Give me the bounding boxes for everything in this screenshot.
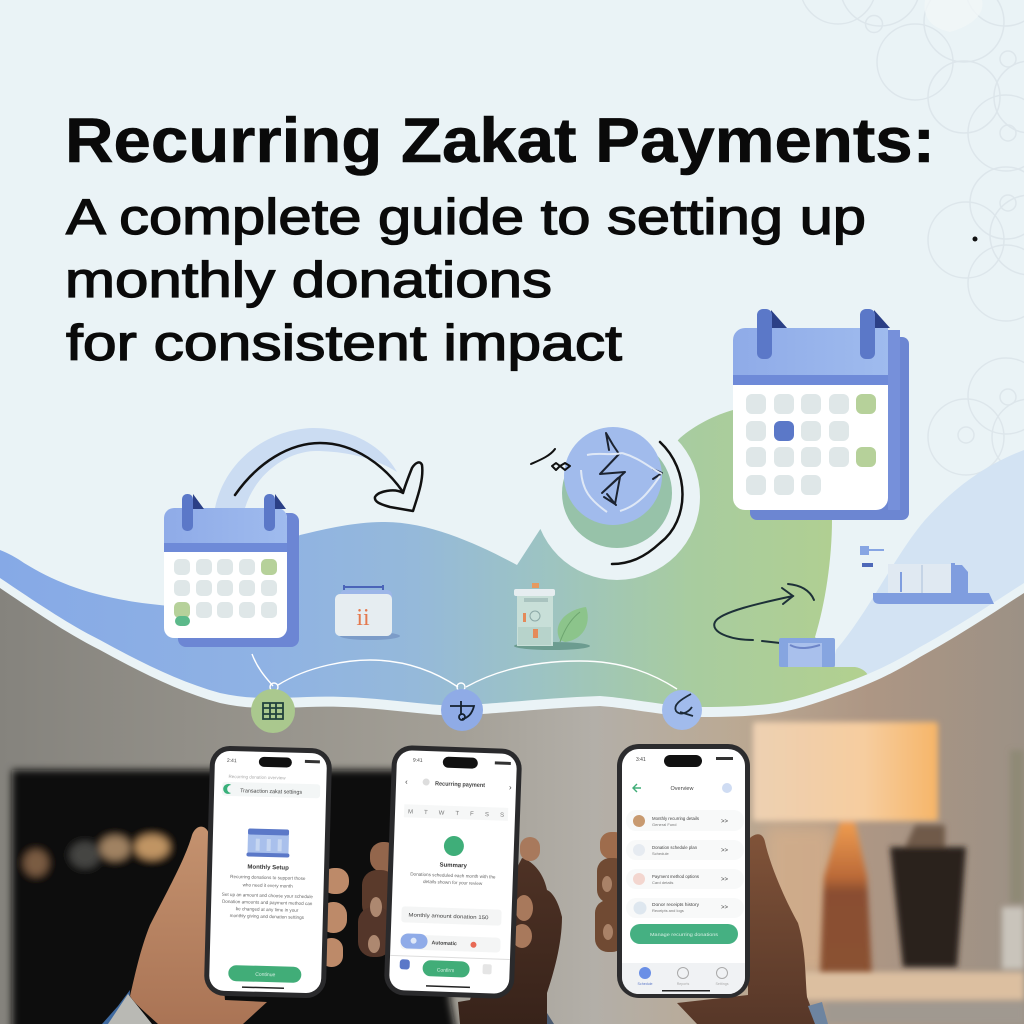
phone 2 copy: Summary bbox=[439, 863, 468, 870]
phone 2 copy: details shown for your review bbox=[423, 879, 483, 886]
subtitle: for consistent impact bbox=[66, 315, 622, 371]
phone 2 bbox=[384, 745, 522, 999]
white cut-out circle around centre badge bbox=[534, 414, 700, 580]
subtitle: monthly donations bbox=[65, 252, 552, 308]
phone 2 toggle row: Automatic bbox=[431, 940, 457, 947]
phone 2 header bbox=[405, 777, 512, 792]
phone 3 tab bar: Reports bbox=[677, 982, 689, 986]
phone 3 tab bar: Schedule bbox=[638, 982, 652, 986]
node: blue tool bbox=[441, 689, 483, 731]
phone 3 list rows: Donor receipts history bbox=[652, 902, 700, 908]
phone 1 button: Continue bbox=[255, 972, 276, 978]
phone 3 list rows: Monthly recurring details bbox=[652, 816, 700, 822]
mini donation box with leaf bbox=[514, 583, 590, 650]
phone 3 list rows: Donation schedule plan bbox=[652, 845, 697, 851]
phone 3: 3:41 bbox=[636, 757, 646, 763]
decorative pattern top right bbox=[800, 0, 1024, 475]
phone 2: 9:41 bbox=[413, 758, 423, 764]
phone 2 tab bar: Confirm bbox=[437, 967, 454, 974]
phone 3 header bbox=[633, 783, 732, 793]
phone 3 list rows: Payment method options bbox=[652, 874, 700, 880]
large calendar right bbox=[733, 309, 909, 520]
main blue to green hill bbox=[0, 410, 870, 730]
connector lines bbox=[252, 654, 677, 691]
top panel with curved lower edge bbox=[0, 0, 1024, 733]
phone 1 copy: who need it every month bbox=[243, 882, 293, 889]
side table bbox=[800, 750, 1024, 1024]
mini scroll card bbox=[779, 638, 835, 667]
mini date tile: ii bbox=[356, 605, 370, 631]
phone 2 header: › bbox=[509, 783, 512, 792]
dark plant pot bbox=[890, 825, 966, 967]
mini date tile bbox=[335, 585, 400, 640]
phone 3 list rows: >> bbox=[721, 848, 729, 854]
loop arrow lower right bbox=[714, 584, 814, 643]
phone 1 copy: Donation amounts and payment method can bbox=[222, 899, 313, 906]
light arc behind arrow bbox=[215, 428, 397, 508]
phone 2 copy: Donations scheduled each month with the bbox=[410, 872, 496, 880]
mini shelf with books bbox=[860, 546, 994, 604]
phone 2 copy bbox=[410, 862, 496, 886]
phone 3 list rows: Schedule bbox=[652, 851, 669, 856]
middle hand, dark skin bbox=[358, 837, 562, 1024]
small calendar left bbox=[164, 494, 299, 647]
phone 3 list rows: Card details bbox=[652, 880, 673, 885]
inner green disc bbox=[562, 438, 672, 548]
phone 1 copy: Set up an amount and choose your schedule bbox=[222, 892, 313, 899]
phone 2 header: ‹ bbox=[405, 777, 408, 786]
phone 2 week strip bbox=[404, 804, 508, 821]
curved arrow to heart bbox=[235, 443, 422, 511]
bubble highlight bbox=[924, 0, 983, 32]
title bbox=[65, 106, 935, 371]
phone 3 tab bar: Settings bbox=[716, 982, 729, 986]
phone 1 bbox=[204, 745, 332, 999]
phone 3 tab bar bbox=[622, 963, 745, 994]
phone 3 green button bbox=[630, 924, 738, 944]
dark TV screen bbox=[12, 770, 458, 1024]
stray dot bbox=[972, 236, 978, 242]
status bar bbox=[259, 757, 292, 768]
phone 3 list rows bbox=[626, 810, 744, 918]
phone 1 copy: monthly giving and donation settings bbox=[230, 913, 305, 920]
phone 3 list rows: Receipts and logs bbox=[652, 908, 684, 913]
phone 1 copy: Recurring donations to support those bbox=[230, 874, 306, 881]
subtitle bbox=[65, 189, 866, 371]
phone 3 list rows: >> bbox=[721, 877, 729, 883]
phone 2 green badge bbox=[444, 836, 464, 856]
right hand, dark skin bbox=[595, 832, 828, 1024]
node: blue loop bbox=[662, 690, 702, 730]
phone 1 header: Transaction zakat settings bbox=[240, 788, 302, 796]
title: Recurring Zakat Payments: bbox=[65, 106, 935, 176]
phone 2 row bbox=[401, 906, 502, 926]
lamp bbox=[753, 722, 938, 978]
phone 2 row: Monthly amount donation 150 bbox=[408, 912, 489, 921]
photo background: blurred living room bbox=[0, 560, 1024, 1024]
phone 1 header bbox=[222, 774, 321, 798]
blue blob badge bbox=[564, 427, 662, 525]
phone 3 list rows: General Fund bbox=[652, 822, 676, 827]
phone 1 illustration bbox=[246, 828, 290, 858]
subtitle: A complete guide to setting up bbox=[66, 189, 866, 245]
phone 1 copy: be changed at any time in your bbox=[236, 906, 299, 913]
phone 1 button bbox=[228, 965, 302, 983]
phone 3 green button: Manage recurring donations bbox=[650, 932, 719, 938]
phone 3 header: Overview bbox=[671, 786, 693, 792]
node: green calendar bbox=[251, 689, 295, 733]
phone 1 copy bbox=[221, 864, 314, 920]
light blue right hill bbox=[834, 450, 1024, 674]
warm glow wall bbox=[765, 825, 835, 975]
phone 2 header: Recurring payment bbox=[435, 781, 485, 789]
phone 2 week strip: M T W T F S S bbox=[408, 809, 504, 819]
phone 1 copy: Monthly Setup bbox=[247, 864, 289, 872]
phone 3 bbox=[617, 744, 750, 998]
badge doodle bbox=[531, 433, 682, 564]
phone 2 toggle row bbox=[400, 933, 501, 953]
phone 1: 2:41 bbox=[227, 758, 237, 764]
phone 1 header: Recurring donation overview bbox=[228, 774, 286, 780]
phone 3 list rows: >> bbox=[721, 905, 729, 911]
left hand, light skin bbox=[102, 827, 349, 1024]
phone 2 tab bar bbox=[389, 955, 510, 979]
phone 3 list rows: >> bbox=[721, 819, 729, 825]
